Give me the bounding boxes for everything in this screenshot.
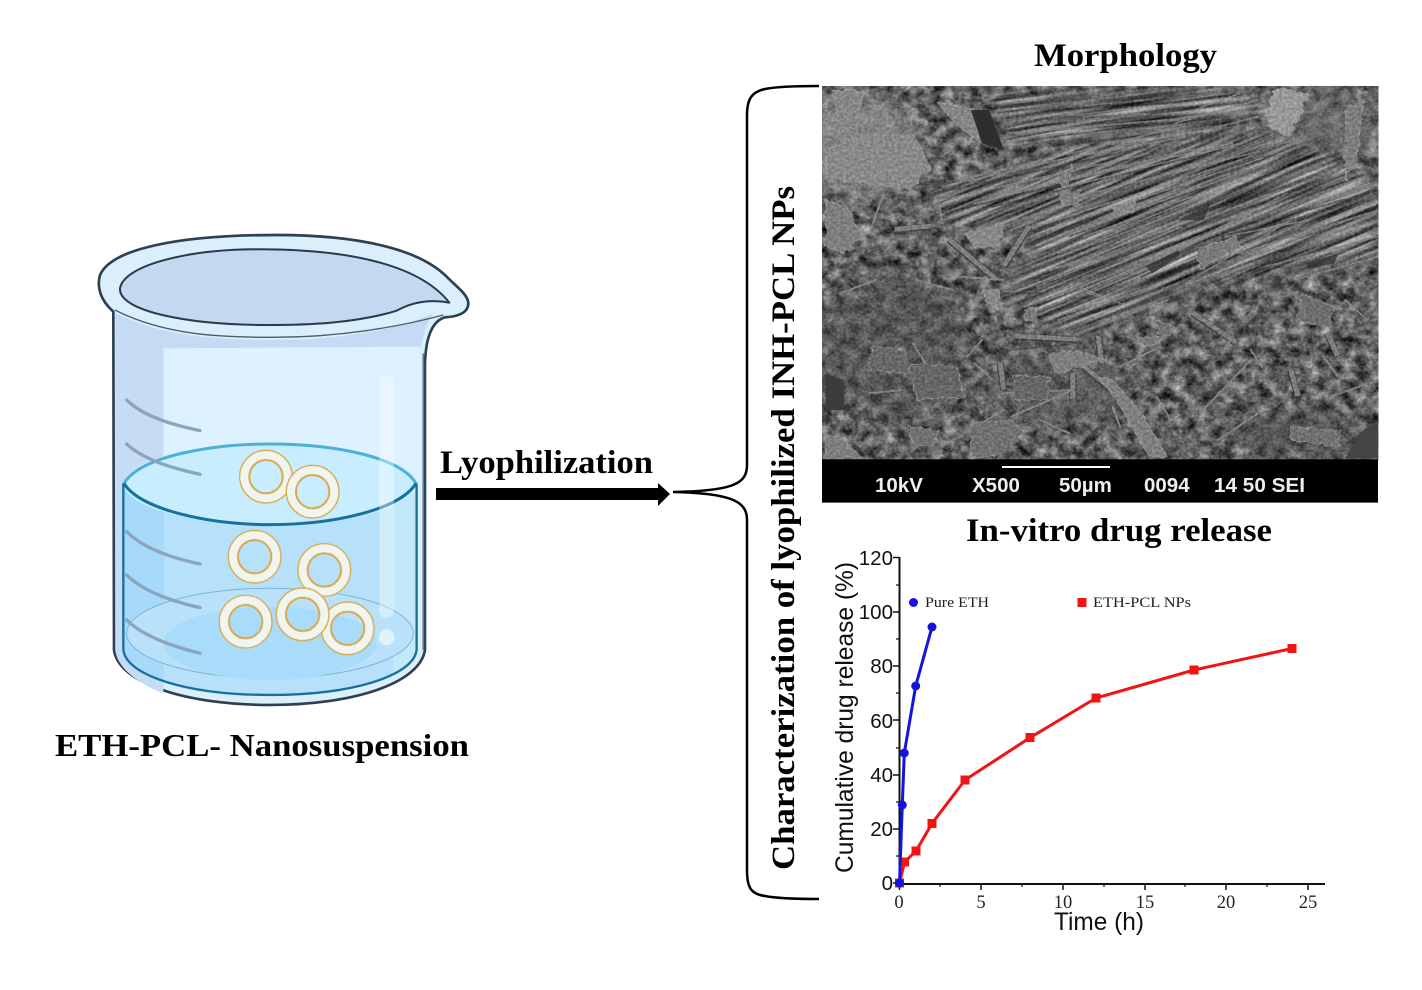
series: Pure ETH <box>895 622 936 888</box>
arrow: lyophilization <box>436 483 670 506</box>
legend: Pure ETH: Pure ETH <box>925 595 990 611</box>
highlight streak <box>379 375 395 645</box>
short thick rods <box>840 193 1378 447</box>
nanoparticles <box>219 450 374 655</box>
y axis numbers: 20 <box>870 818 893 841</box>
dark voids <box>826 110 1378 458</box>
light fibres <box>942 93 1378 333</box>
y axis numbers: 40 <box>870 764 893 787</box>
SEM scale and caption text: 0094 <box>1144 474 1190 497</box>
SEM scale and caption text: 10kV <box>875 474 923 497</box>
fibre bundle shadows <box>935 112 1378 353</box>
label: lyophilization: Lyophilization <box>440 445 653 481</box>
y axis numbers: 60 <box>870 710 893 733</box>
x axis numbers: 5 <box>976 893 986 913</box>
SEM data bar <box>822 459 1378 503</box>
x axis title: Time (h) <box>1054 908 1144 936</box>
x axis numbers: 20 <box>1217 893 1235 913</box>
y axis numbers: 80 <box>870 655 893 678</box>
fine surface grain <box>822 86 1378 460</box>
x axis numbers: 25 <box>1299 893 1317 913</box>
axes <box>893 557 1325 890</box>
y axis numbers: 120 <box>859 547 893 570</box>
beaker illustration <box>99 235 468 705</box>
x axis numbers: 15 <box>1136 893 1154 913</box>
legend: ETH-PCL NPs: ETH-PCL NPs <box>1093 595 1191 611</box>
y axis title: Cumulative drug release (%) <box>831 562 859 873</box>
vertical heading: Characterization of lyophilized INH-PCL NPs <box>766 186 802 870</box>
SEM scale and caption text: X500 <box>972 474 1020 497</box>
SEM scale and caption text <box>875 466 1305 497</box>
line chart: drug release <box>831 547 1325 936</box>
curly bracket <box>673 86 819 899</box>
heading: in-vitro drug release: In-vitro drug release <box>966 513 1272 549</box>
glass shading <box>115 310 443 693</box>
beaker glass body <box>99 235 468 705</box>
y axis numbers: 0 <box>882 872 893 895</box>
liquid <box>123 443 417 697</box>
series: ETH-PCL NPs <box>895 644 1296 888</box>
beaker opening <box>120 249 449 325</box>
y axis numbers: 100 <box>859 601 893 624</box>
label: ETH-PCL nanosuspension: ETH-PCL- Nanosuspension <box>55 727 469 763</box>
SEM scale and caption text: 50µm <box>1059 474 1112 497</box>
SEM scale and caption text: 14 50 SEI <box>1214 474 1305 497</box>
x axis numbers: 10 <box>1054 893 1072 913</box>
fibre bundle texture <box>926 124 1378 341</box>
SEM micrograph <box>822 86 1378 808</box>
x axis numbers: 0 <box>894 893 904 913</box>
graduation marks <box>127 400 200 653</box>
bright crystal clumps <box>826 88 1363 458</box>
heading: morphology: Morphology <box>1034 38 1218 74</box>
y axis numbers <box>859 547 893 895</box>
x axis numbers <box>894 893 1317 913</box>
upper fibre bundle texture <box>984 86 1266 149</box>
